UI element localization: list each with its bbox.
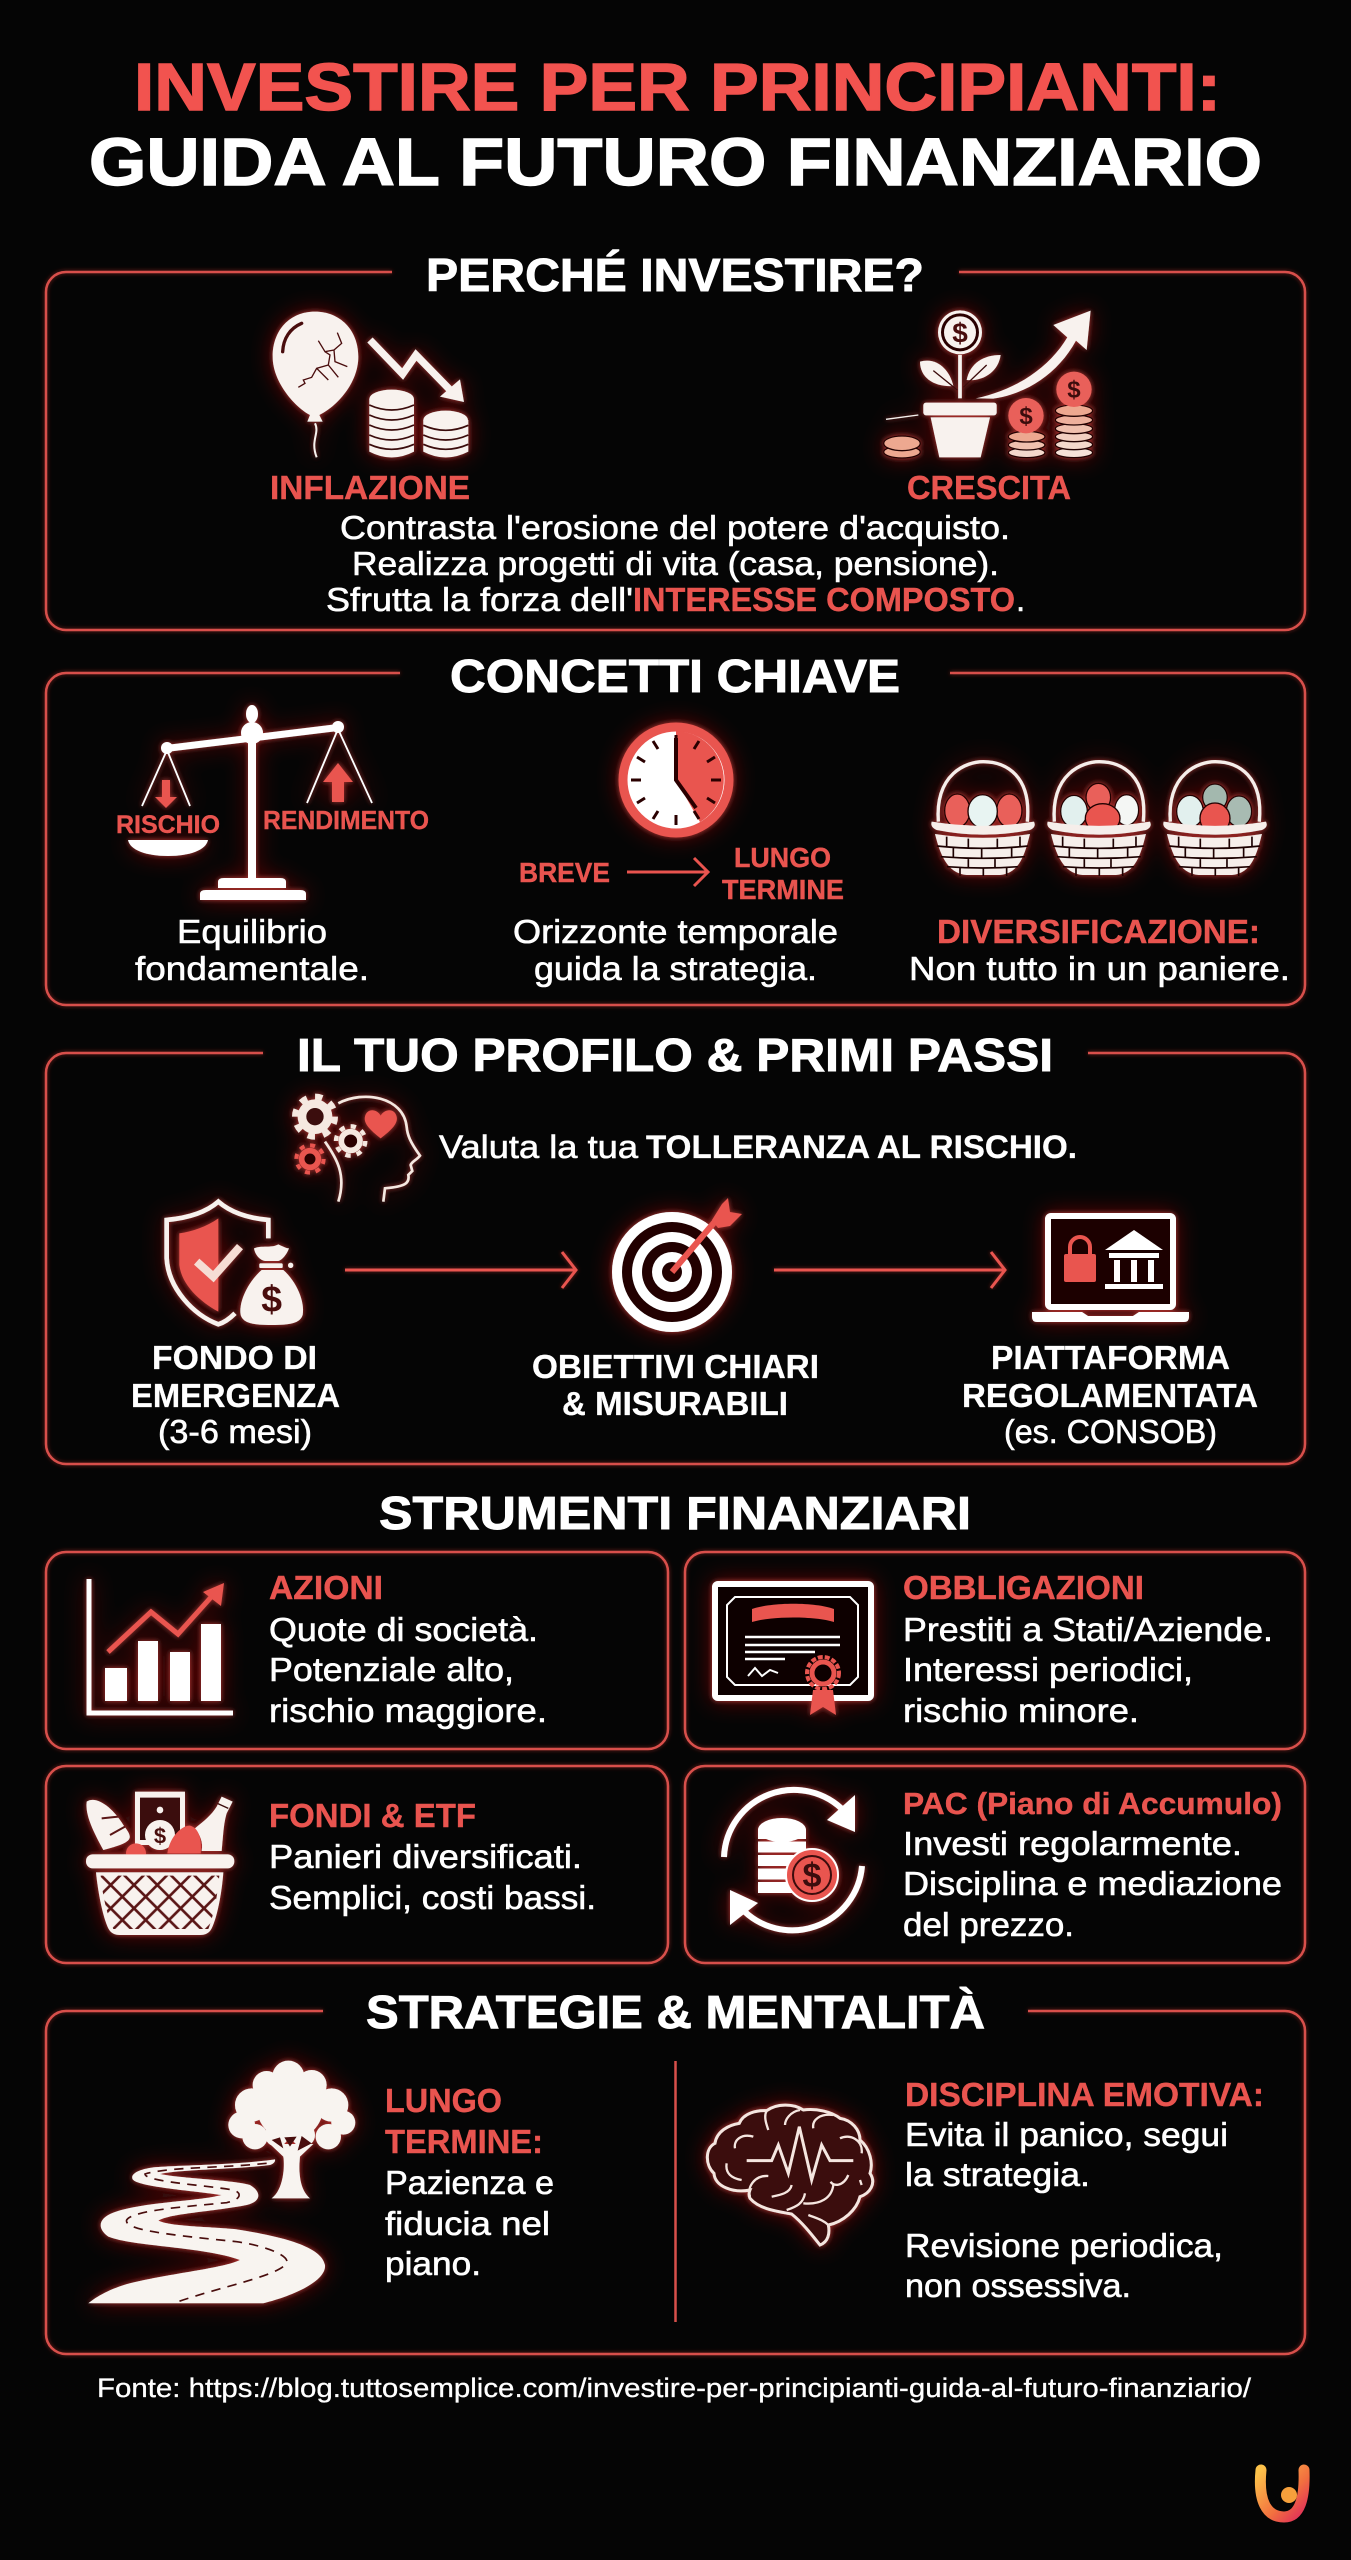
label: obiettivi <box>532 1348 819 1422</box>
source line: Fonte: https://blog.tuttosemplice.com/investire-per-principianti-guida-al-futuro-finanziario/ <box>97 2373 1252 2403</box>
label: fondo di emergenza <box>131 1339 340 1450</box>
label: crescita: CRESCITA <box>907 469 1071 506</box>
heading: concetti chiave: CONCETTI CHIAVE <box>450 650 900 702</box>
text: azioni: Quote di società. <box>269 1611 538 1648</box>
icon: plant and growing coins: $ <box>1019 403 1033 430</box>
text: orizzonte <box>513 913 838 987</box>
text: diversificazione: Non tutto in un paniere. <box>909 950 1290 987</box>
label: lungo termine: LUNGO <box>734 842 831 873</box>
icon: three egg baskets <box>931 762 1267 876</box>
text: diversificazione: DIVERSIFICAZIONE: <box>937 913 1260 950</box>
icon: head with gears and heart <box>295 1097 420 1202</box>
label: lungo termine: TERMINE <box>722 874 844 905</box>
text: lungo termine: TERMINE: <box>385 2123 543 2160</box>
icon: brain with pulse <box>707 2105 873 2245</box>
panel: profilo e primi passi <box>46 1029 1305 1464</box>
arrow: step 1 to 2 <box>345 1252 576 1288</box>
text: lungo termine: piano. <box>385 2245 481 2282</box>
label: inflazione: INFLAZIONE <box>270 469 470 506</box>
text: obbligazioni: OBBLIGAZIONI <box>903 1569 1144 1606</box>
heading: strategie: STRATEGIE & MENTALITÀ <box>366 1986 985 2038</box>
label: piattaforma: PIATTAFORMA <box>991 1339 1230 1376</box>
arrow: breve to lungo <box>627 858 708 886</box>
label: rendimento: RENDIMENTO <box>263 805 429 835</box>
label: piattaforma: (es. CONSOB) <box>1004 1413 1217 1450</box>
text: fondi e etf <box>269 1797 596 1916</box>
text block: reasons: . <box>1016 581 1025 618</box>
label: obiettivi: & MISURABILI <box>562 1385 788 1422</box>
text: disciplina emotiva: DISCIPLINA EMOTIVA: <box>905 2076 1264 2113</box>
text: obbligazioni: Prestiti a Stati/Aziende. <box>903 1611 1273 1648</box>
icon: shield and money bag: $ <box>261 1278 282 1320</box>
icon: plant and growing coins: $ <box>1067 377 1081 404</box>
text: pac <box>903 1786 1282 1943</box>
heading: perché investire: PERCHÉ INVESTIRE? <box>426 249 924 301</box>
icon: bar chart <box>89 1579 233 1713</box>
label: obiettivi: OBIETTIVI CHIARI <box>532 1348 819 1385</box>
text: orizzonte: Orizzonte temporale <box>513 913 838 950</box>
text: azioni: Potenziale alto, <box>269 1651 514 1688</box>
text: obbligazioni: rischio minore. <box>903 1692 1139 1729</box>
text block: reasons: Sfrutta la forza dell' <box>326 581 633 618</box>
text: equilibrio: Equilibrio <box>177 913 327 950</box>
card: fondi e etf <box>46 1766 668 1963</box>
text: lungo termine: LUNGO <box>385 2082 502 2119</box>
text: fondi e etf: Semplici, costi bassi. <box>269 1879 596 1916</box>
label: piattaforma: REGOLAMENTATA <box>962 1377 1258 1414</box>
text: fondi e etf: FONDI & ETF <box>269 1797 476 1834</box>
title <box>89 50 1262 200</box>
icon: tree and winding road <box>88 2061 355 2303</box>
text: lungo termine <box>385 2082 554 2282</box>
logo <box>1260 2470 1304 2517</box>
text: pac: del prezzo. <box>903 1906 1074 1943</box>
text: orizzonte: guida la strategia. <box>534 950 817 987</box>
icon: cycle arrows and coins <box>724 1790 862 1930</box>
card: azioni <box>46 1552 668 1749</box>
text: equilibrio <box>135 913 369 987</box>
text: tolleranza al rischio: Valuta la tua <box>439 1129 638 1165</box>
panel: concetti chiave <box>46 650 1305 1005</box>
text: tolleranza al rischio <box>439 1129 1077 1165</box>
text: disciplina emotiva: la strategia. <box>905 2156 1090 2193</box>
panel: perché investire <box>46 249 1305 630</box>
label: lungo termine <box>722 842 844 905</box>
icon: cracked balloon with falling coins <box>273 312 468 457</box>
text: azioni: AZIONI <box>269 1569 383 1606</box>
panel: strategie e mentalità <box>46 1986 1305 2354</box>
text: disciplina emotiva: Revisione periodica, <box>905 2227 1223 2264</box>
icon: target with arrow <box>612 1198 742 1332</box>
icon: shield and money bag <box>167 1202 303 1325</box>
card: pac <box>685 1766 1305 1963</box>
icon: laptop with lock and bank <box>1032 1216 1189 1322</box>
text: disciplina emotiva: non ossessiva. <box>905 2267 1131 2304</box>
title: INVESTIRE PER PRINCIPIANTI: <box>134 50 1221 125</box>
text: diversificazione <box>909 913 1290 987</box>
icon: shopping basket <box>86 1792 234 1935</box>
arrow: step 2 to 3 <box>774 1252 1005 1288</box>
text: pac: Disciplina e mediazione <box>903 1865 1282 1902</box>
label: piattaforma <box>962 1339 1258 1450</box>
text block: reasons <box>326 509 1025 618</box>
text: disciplina emotiva <box>905 2076 1264 2304</box>
text: equilibrio: fondamentale. <box>135 950 369 987</box>
text: fondi e etf: Panieri diversificati. <box>269 1838 582 1875</box>
text: azioni <box>269 1569 547 1729</box>
icon: cycle arrows and coins: $ <box>803 1857 822 1895</box>
heading: profilo: IL TUO PROFILO & PRIMI PASSI <box>297 1029 1053 1081</box>
text: lungo termine: Pazienza e <box>385 2164 554 2201</box>
card: obbligazioni <box>685 1552 1305 1749</box>
text: pac: PAC (Piano di Accumulo) <box>903 1786 1282 1821</box>
label: breve: BREVE <box>519 857 610 888</box>
text: obbligazioni <box>903 1569 1273 1729</box>
text block: reasons: INTERESSE COMPOSTO <box>633 581 1015 618</box>
text block: reasons: Realizza progetti di vita (casa, pensione). <box>352 545 999 582</box>
icon: balance scale <box>128 705 372 900</box>
icon: plant and growing coins: $ <box>952 317 968 348</box>
label: fondo di emergenza: FONDO DI <box>152 1339 317 1376</box>
label: fondo di emergenza: EMERGENZA <box>131 1377 340 1414</box>
icon: plant and growing coins <box>884 310 1093 458</box>
title: GUIDA AL FUTURO FINANZIARIO <box>89 125 1262 200</box>
icon: clock <box>623 727 729 833</box>
icon: shopping basket: $ <box>154 1823 166 1848</box>
text: lungo termine: fiducia nel <box>385 2205 550 2242</box>
text: pac: Investi regolarmente. <box>903 1825 1242 1862</box>
text: disciplina emotiva: Evita il panico, segui <box>905 2116 1228 2153</box>
text block: reasons: Contrasta l'erosione del potere d'acquisto. <box>340 509 1010 546</box>
text: tolleranza al rischio: TOLLERANZA AL RISCHIO. <box>646 1129 1077 1165</box>
text: obbligazioni: Interessi periodici, <box>903 1651 1193 1688</box>
label: rischio: RISCHIO <box>116 811 220 839</box>
heading: strumenti: STRUMENTI FINANZIARI <box>379 1487 971 1539</box>
icon: bond certificate <box>715 1584 871 1715</box>
label: fondo di emergenza: (3-6 mesi) <box>158 1413 312 1450</box>
text: azioni: rischio maggiore. <box>269 1692 547 1729</box>
